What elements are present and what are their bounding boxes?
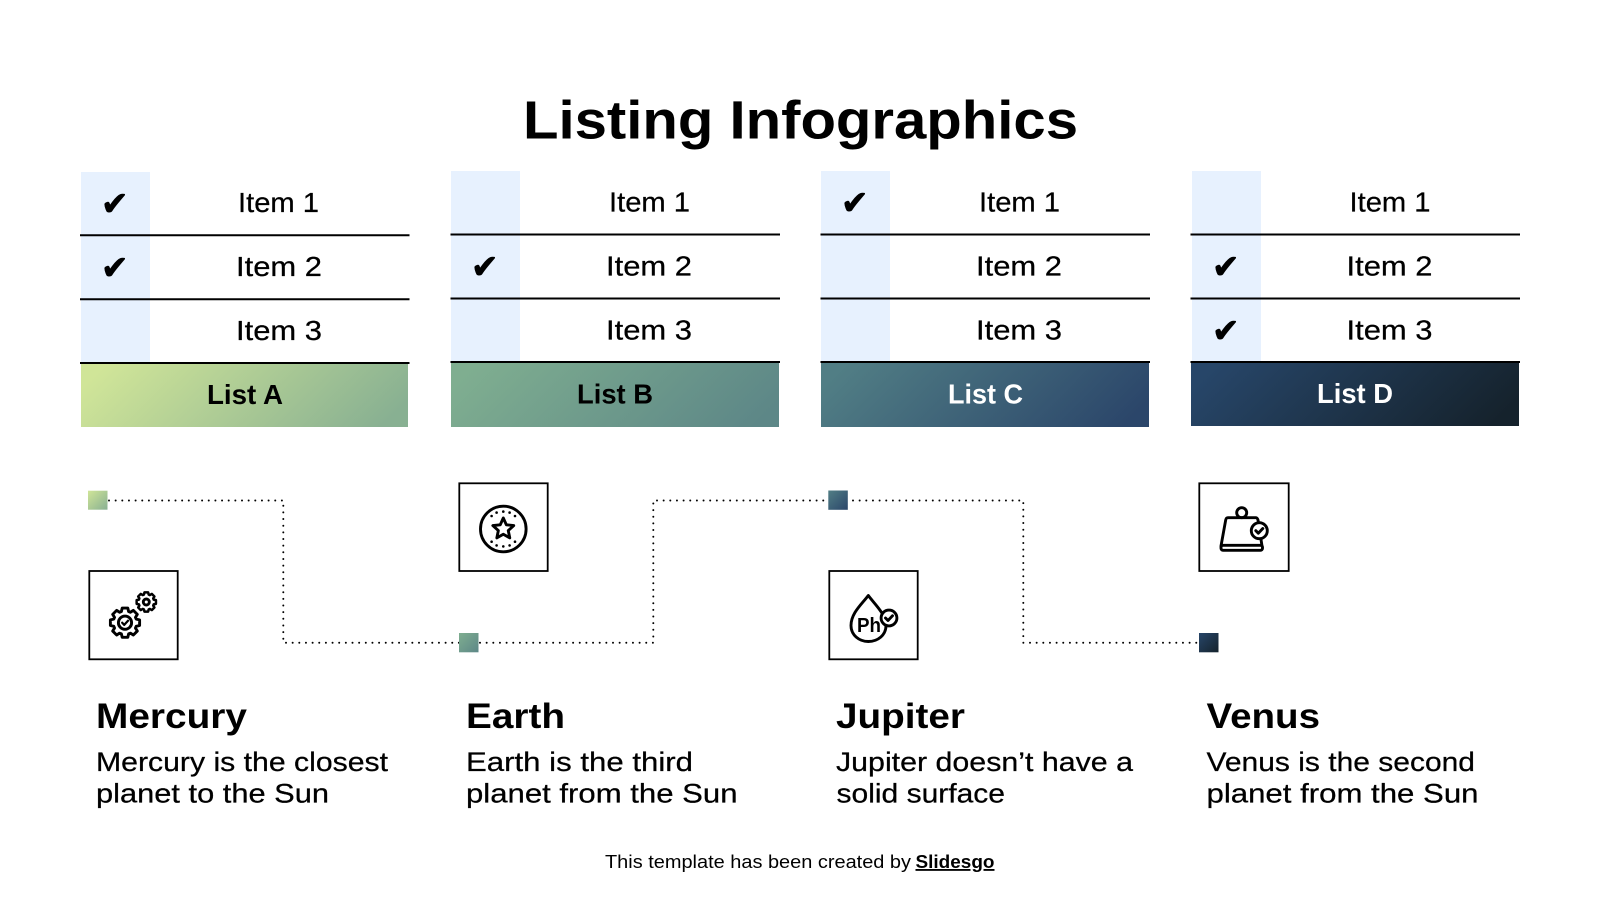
check column B [451,171,520,362]
item 1 D: Item 1 [1350,186,1430,218]
check column A [81,172,150,363]
marker D [1199,633,1218,652]
check D2: ✔ [1212,247,1240,286]
item 3 A: Item 3 [236,315,322,346]
icon: pH drop: Ph [857,615,881,637]
text block: Venus: planet from the Sun [1206,779,1478,809]
header bar C [821,362,1149,427]
text block: Jupiter: Jupiter [836,697,965,736]
check B2: ✔ [471,247,498,286]
text block: Earth: Earth is the third [466,747,693,777]
check A2: ✔ [101,248,128,287]
panel: list B [450,171,780,427]
header bar D [1191,362,1519,426]
item 2 D: Item 2 [1346,250,1432,282]
text block: Jupiter: Jupiter doesn’t have a [836,747,1133,777]
item 3 C: Item 3 [976,314,1062,346]
check column D [1192,171,1261,362]
item 2 B: Item 2 [606,250,692,282]
marker A [88,491,108,510]
item 1 A: Item 1 [238,187,319,218]
check D3: ✔ [1212,311,1240,350]
icon: pH drop [829,571,918,659]
item 1 C: Item 1 [979,186,1060,218]
icon: weight [1199,483,1289,571]
item 3 B: Item 3 [606,314,692,346]
item 2 A: Item 2 [236,251,322,282]
text block: Venus: Venus is the second [1206,747,1475,777]
marker C [828,490,848,510]
dotted connector path [109,500,1199,643]
item 1 B: Item 1 [609,186,690,218]
header bar B [451,362,779,427]
marker B [459,633,478,652]
text block: Mercury [96,697,389,809]
check A1: ✔ [101,184,128,223]
text block: Venus [1206,697,1478,809]
panel: list A [80,172,410,427]
panel: list D [1190,171,1520,426]
label list B: List B [577,378,653,410]
text block: Earth: planet from the Sun [466,779,738,809]
item 3 D: Item 3 [1346,314,1432,346]
label list C: List C [948,378,1023,410]
check column C [821,171,890,362]
text block: Jupiter [836,697,1133,809]
label list A: List A [207,379,283,410]
icon: star coin [459,483,548,571]
title: Listing Infographics [523,90,1078,150]
text block: Jupiter: solid surface [836,779,1005,809]
text block: Venus: Venus [1206,697,1320,736]
text block: Mercury: Mercury is the closest [96,747,389,777]
header bar A [81,363,408,427]
text block: Earth [466,697,738,809]
panel: list C [820,171,1150,427]
text block: Mercury: planet to the Sun [96,779,329,809]
icon: gears [89,571,178,659]
check C1: ✔ [841,183,868,222]
item 2 C: Item 2 [976,250,1062,282]
footer credit: This template has been created by [605,851,912,872]
text block: Earth: Earth [466,697,565,736]
label list D: List D [1317,378,1393,409]
text block: Mercury: Mercury [96,697,248,736]
footer credit: Slidesgo [916,851,994,872]
